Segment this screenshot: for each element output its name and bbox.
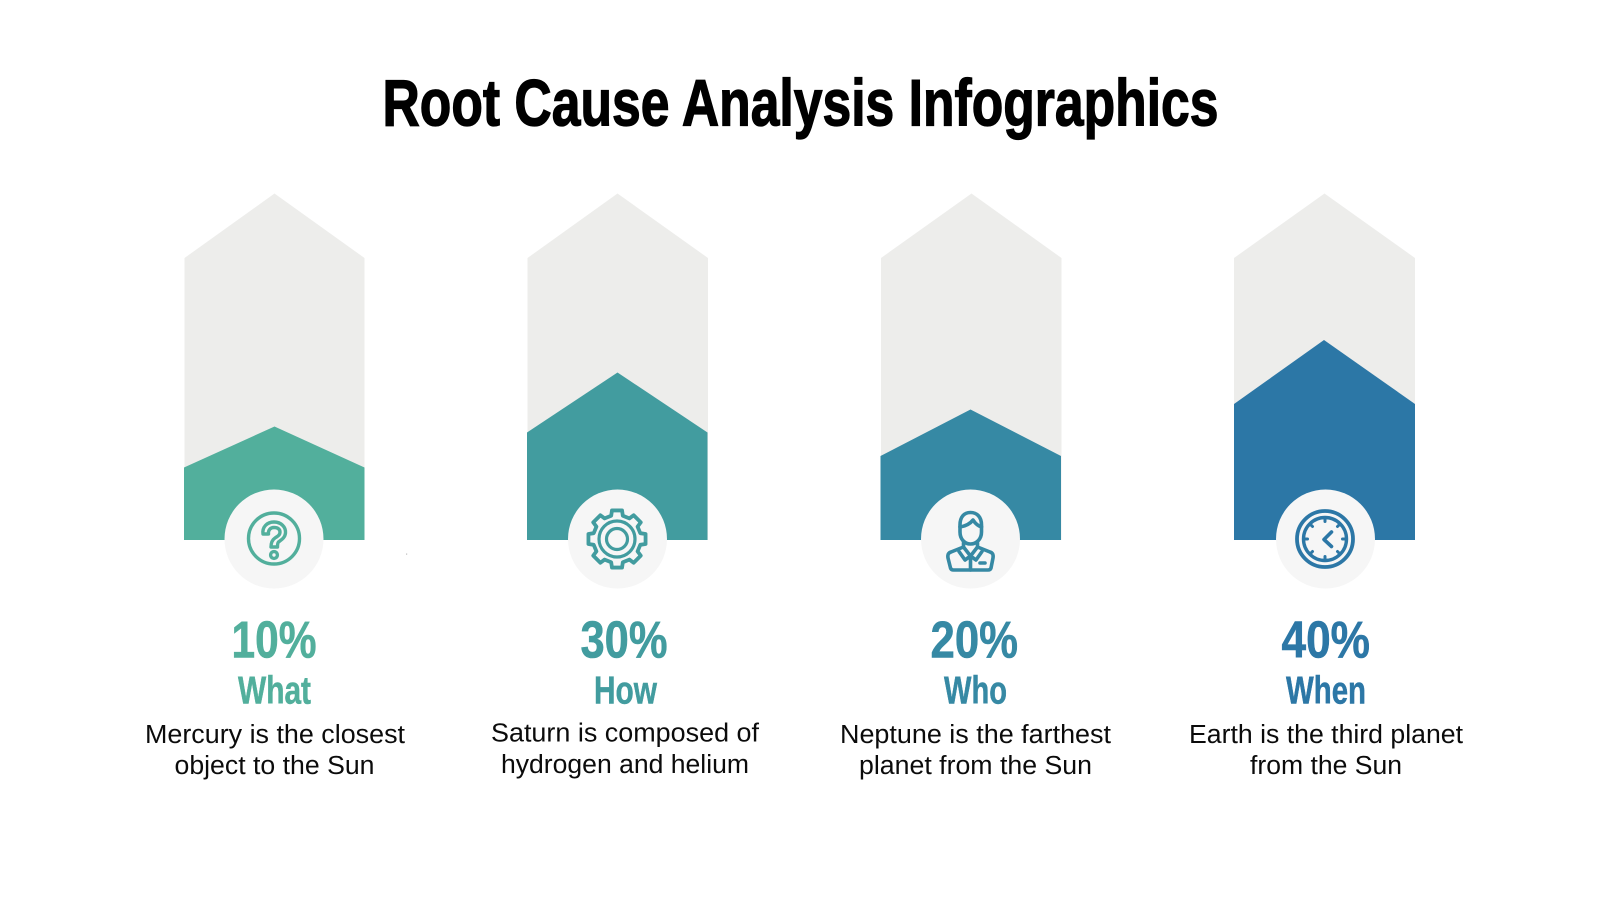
description: who: planet from the Sun	[859, 752, 1092, 780]
description: what: object to the Sun	[174, 752, 374, 780]
progress arrow: how 30%	[527, 372, 708, 540]
grey arrow: how	[528, 194, 708, 540]
value: 10%: 10%	[232, 612, 316, 670]
icon: gear	[568, 490, 667, 588]
panel: when	[1189, 194, 1463, 780]
description: who: Neptune is the farthest	[840, 721, 1111, 749]
label: What: What	[238, 670, 311, 712]
value: 40%: 40%	[1282, 612, 1370, 670]
value: 30%: 30%	[580, 612, 668, 670]
title: Root Cause Analysis Infographics	[382, 66, 1218, 140]
label: When: When	[1286, 670, 1366, 712]
grey arrow: who	[881, 194, 1062, 540]
description: when: Earth is the third planet	[1189, 721, 1463, 749]
panel: who	[840, 194, 1111, 780]
icon: question mark	[224, 490, 324, 588]
description: how: hydrogen and helium	[501, 751, 749, 779]
icon: person	[921, 490, 1020, 588]
description: when: from the Sun	[1250, 752, 1402, 780]
progress arrow: who 20%	[880, 410, 1061, 540]
description: how	[491, 720, 760, 779]
description: who	[840, 721, 1111, 780]
panel: how	[491, 194, 760, 779]
description: how: Saturn is composed of	[491, 720, 760, 748]
icon: clock	[1276, 490, 1375, 588]
progress arrow: what 10%	[184, 426, 364, 540]
grey arrow: what	[184, 194, 364, 540]
label: Who: Who	[944, 670, 1007, 712]
description: what	[145, 721, 405, 780]
label: How: How	[594, 670, 658, 712]
description: what: Mercury is the closest	[145, 721, 405, 749]
panel: what	[145, 194, 405, 780]
grey arrow: when	[1234, 194, 1415, 540]
description: when	[1189, 721, 1463, 780]
value: 20%: 20%	[930, 612, 1018, 670]
progress arrow: when 40%	[1234, 340, 1415, 540]
speck	[406, 554, 407, 555]
